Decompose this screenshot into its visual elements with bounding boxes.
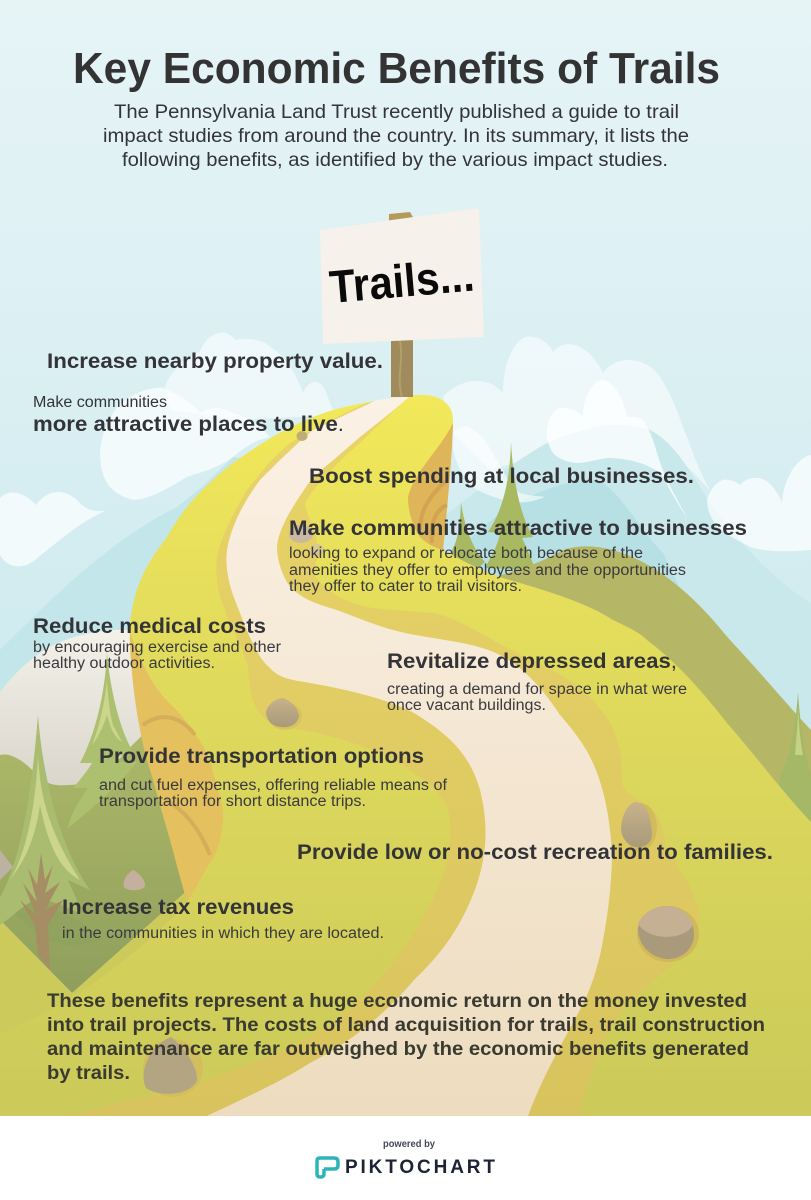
benefit: attractive places: more attractive places to live .: [33, 412, 344, 436]
signpost: [389, 212, 414, 397]
back clouds: [165, 333, 710, 490]
road: [207, 396, 612, 1116]
benefit: depressed areas: Revitalize depressed areas ,: [387, 649, 677, 673]
grey rock left: [0, 850, 13, 880]
conclusion: into trail projects. The costs of land acquisition for trails, trail construction: [47, 1014, 765, 1036]
benefit: tax revenues: in the communities in which they are located.: [62, 925, 384, 942]
benefit: attractive to businesses: amenities they offer to employees and the opportunities: [289, 562, 686, 579]
orange rock side top: [408, 423, 453, 550]
tree left small: [68, 652, 137, 828]
title: Key Economic Benefits of Trails: [73, 44, 720, 93]
rocks: [143, 431, 699, 1097]
benefit: recreation: Provide low or no-cost recreation to families.: [297, 840, 773, 864]
benefit: depressed areas: once vacant buildings.: [387, 697, 546, 714]
intro text: [103, 101, 689, 171]
conclusion: and maintenance are far outweighed by the economic benefits generated: [47, 1038, 749, 1060]
benefit: attractive to businesses: they offer to cater to trail visitors.: [289, 578, 522, 595]
road border band: [72, 396, 700, 1116]
benefit: attractive to businesses: looking to expand or relocate both because of the: [289, 545, 643, 562]
conclusion: These benefits represent a huge economic return on the money invested: [47, 990, 747, 1012]
benefit: property value: Increase nearby property value.: [47, 349, 383, 373]
benefit: transportation: [99, 744, 448, 810]
benefit: tax revenues: [62, 895, 384, 942]
conclusion: [47, 990, 765, 1084]
benefit: attractive places: Make communities: [33, 394, 167, 411]
benefit: medical costs: by encouraging exercise and other: [33, 639, 281, 656]
benefit: medical costs: [33, 614, 281, 672]
benefit: transportation: and cut fuel expenses, offering reliable means of: [99, 777, 448, 794]
sign text: Trails...: [327, 249, 476, 313]
conclusion: by trails.: [47, 1062, 130, 1084]
benefit: attractive places: [33, 394, 344, 436]
benefit: medical costs: healthy outdoor activities.: [33, 655, 215, 672]
benefit: medical costs: Reduce medical costs: [33, 614, 266, 638]
blue mountains: [0, 425, 811, 800]
lime ground left: [0, 870, 400, 1116]
main yellow hill: [0, 395, 811, 1116]
footer: [0, 1116, 811, 1200]
benefit: attractive to businesses: Make communities attractive to businesses: [289, 516, 747, 540]
benefit: local spending: Boost spending at local businesses.: [309, 464, 694, 488]
olive hill right: [450, 546, 811, 1000]
benefit: tax revenues: Increase tax revenues: [62, 895, 294, 919]
intro text: impact studies from around the country. In its summary, it lists the: [103, 125, 689, 147]
benefit: depressed areas: creating a demand for space in what were: [387, 681, 687, 698]
orange hill side left: [130, 633, 223, 902]
sign board: [320, 208, 484, 344]
benefit: transportation: transportation for short distance trips.: [99, 793, 366, 810]
piktochart logo: PIKTOCHART: [345, 1157, 495, 1178]
intro text: The Pennsylvania Land Trust recently published a guide to trail: [114, 101, 679, 123]
tree right: [780, 692, 811, 830]
powered by: powered by: [383, 1138, 435, 1150]
small rock left: [124, 870, 145, 890]
benefit: depressed areas: [387, 649, 687, 714]
benefit: transportation: Provide transportation options: [99, 744, 424, 768]
green hill left: [0, 733, 230, 993]
benefit: attractive to businesses: [289, 516, 747, 595]
front clouds: [0, 380, 811, 566]
intro text: following benefits, as identified by the various impact studies.: [122, 149, 668, 171]
tree left big: [0, 715, 102, 970]
snowy mountain left: [0, 630, 150, 790]
center-right trees: [450, 442, 535, 575]
